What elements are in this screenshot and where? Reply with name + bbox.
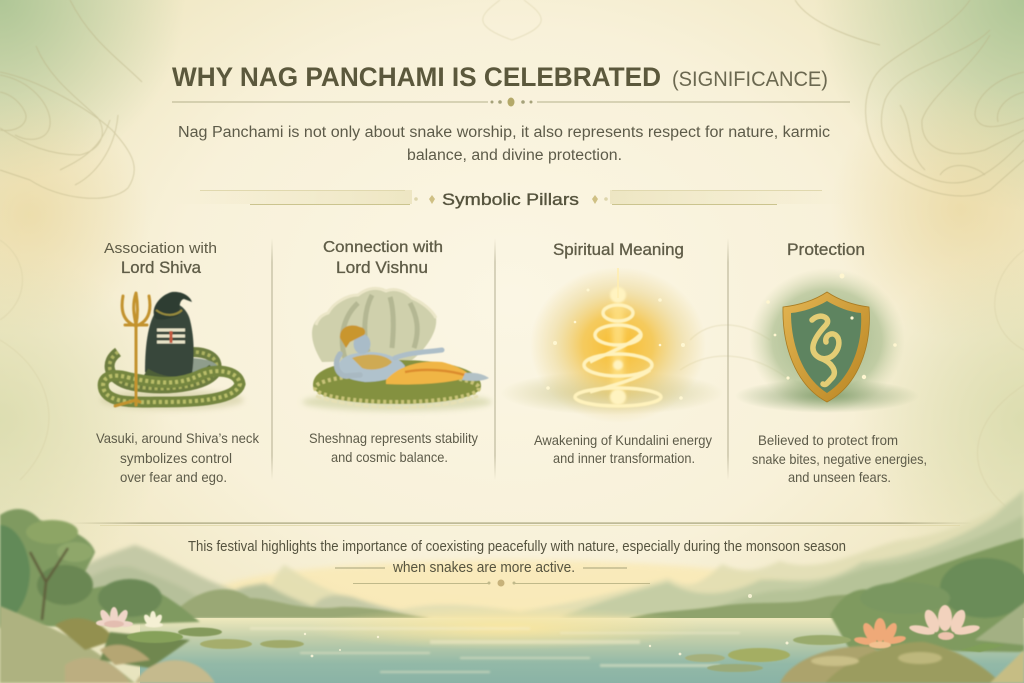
heading: Connection with Lord Vishnu: Lord Vishnu	[336, 259, 428, 277]
heading: Connection with Lord Vishnu: Connection with	[323, 239, 443, 256]
title: (SIGNIFICANCE)	[672, 68, 828, 91]
far mountains	[70, 490, 1024, 618]
text: sheshnag description: and cosmic balance.	[331, 449, 448, 465]
distant tree line	[170, 589, 1024, 625]
lotus flowers left	[96, 607, 164, 628]
text: kundalini description: and inner transformation.	[553, 450, 695, 466]
pillar 2: Lord Vishnu	[302, 239, 492, 465]
text: protection description: and unseen fears.	[788, 469, 891, 485]
decorative serpent line art, right	[795, 0, 1024, 196]
text: sheshnag description: Sheshnag represents stability	[309, 430, 478, 446]
lily pads right	[685, 635, 851, 672]
section heading: symbolic pillars: Symbolic Pillars	[442, 191, 579, 209]
text: vasuki description: Vasuki, around Shiva’s neck	[96, 430, 260, 446]
landscape	[0, 490, 1024, 683]
heading: Connection with Lord Vishnu	[323, 239, 443, 277]
water	[140, 618, 1024, 683]
water sparkles	[304, 594, 788, 657]
text: protection description: snake bites, negative energies,	[752, 451, 927, 467]
text: vasuki description: over fear and ego.	[120, 469, 227, 485]
title divider	[172, 98, 850, 106]
intro text	[178, 124, 830, 164]
text: protection description: Believed to protect from	[758, 432, 898, 448]
icon: shiva lingam with snake and trident	[100, 292, 244, 410]
column dividers	[272, 238, 728, 480]
text: kundalini description	[534, 432, 712, 466]
heading: Association with Lord Shiva: Association with	[104, 240, 217, 257]
decorative serpent line art, left	[0, 0, 142, 198]
footer rule	[70, 522, 972, 526]
heading: Protection: Protection	[787, 241, 865, 259]
heading: Spiritual Meaning: Spiritual Meaning	[553, 241, 684, 259]
footer text: This festival highlights the importance of coexisting peacefully with nature, especially during the monsoon season	[188, 539, 846, 555]
pillar 1: Lord Shiva	[96, 240, 260, 485]
text: vasuki description: symbolizes control	[120, 450, 232, 466]
footer ornament	[335, 568, 650, 586]
trees right	[830, 538, 1024, 652]
icon: vishnu on sheshnag	[302, 288, 492, 411]
lotus flowers right	[854, 605, 1005, 652]
lily pads left	[127, 628, 304, 649]
footer text	[188, 539, 846, 576]
heading: Association with Lord Shiva	[104, 240, 217, 277]
sky glow	[212, 560, 812, 630]
text: protection description	[752, 432, 927, 485]
pillar 3: Spiritual Meaning	[500, 241, 724, 466]
text: kundalini description: Awakening of Kundalini energy	[534, 432, 712, 448]
heading: Association with Lord Shiva: Lord Shiva	[121, 259, 202, 277]
title: WHY NAG PANCHAMI IS CELEBRATED	[172, 62, 661, 92]
intro text: balance, and divine protection.	[407, 147, 622, 164]
trees left	[0, 509, 200, 628]
decorative swirls, middle	[0, 0, 1024, 510]
rocks left	[0, 606, 215, 683]
icon: shield with snake	[735, 268, 919, 413]
text: vasuki description	[96, 430, 260, 485]
pillar 4: Protection	[735, 241, 927, 485]
intro text: Nag Panchami is not only about snake worship, it also represents respect for nature, karmic	[178, 124, 830, 141]
icon: kundalini energy spiral	[500, 267, 724, 423]
rocks right	[780, 642, 1024, 683]
text: sheshnag description	[309, 430, 478, 465]
footer text: when snakes are more active.	[392, 560, 575, 576]
symbolic pillars divider	[172, 190, 850, 205]
